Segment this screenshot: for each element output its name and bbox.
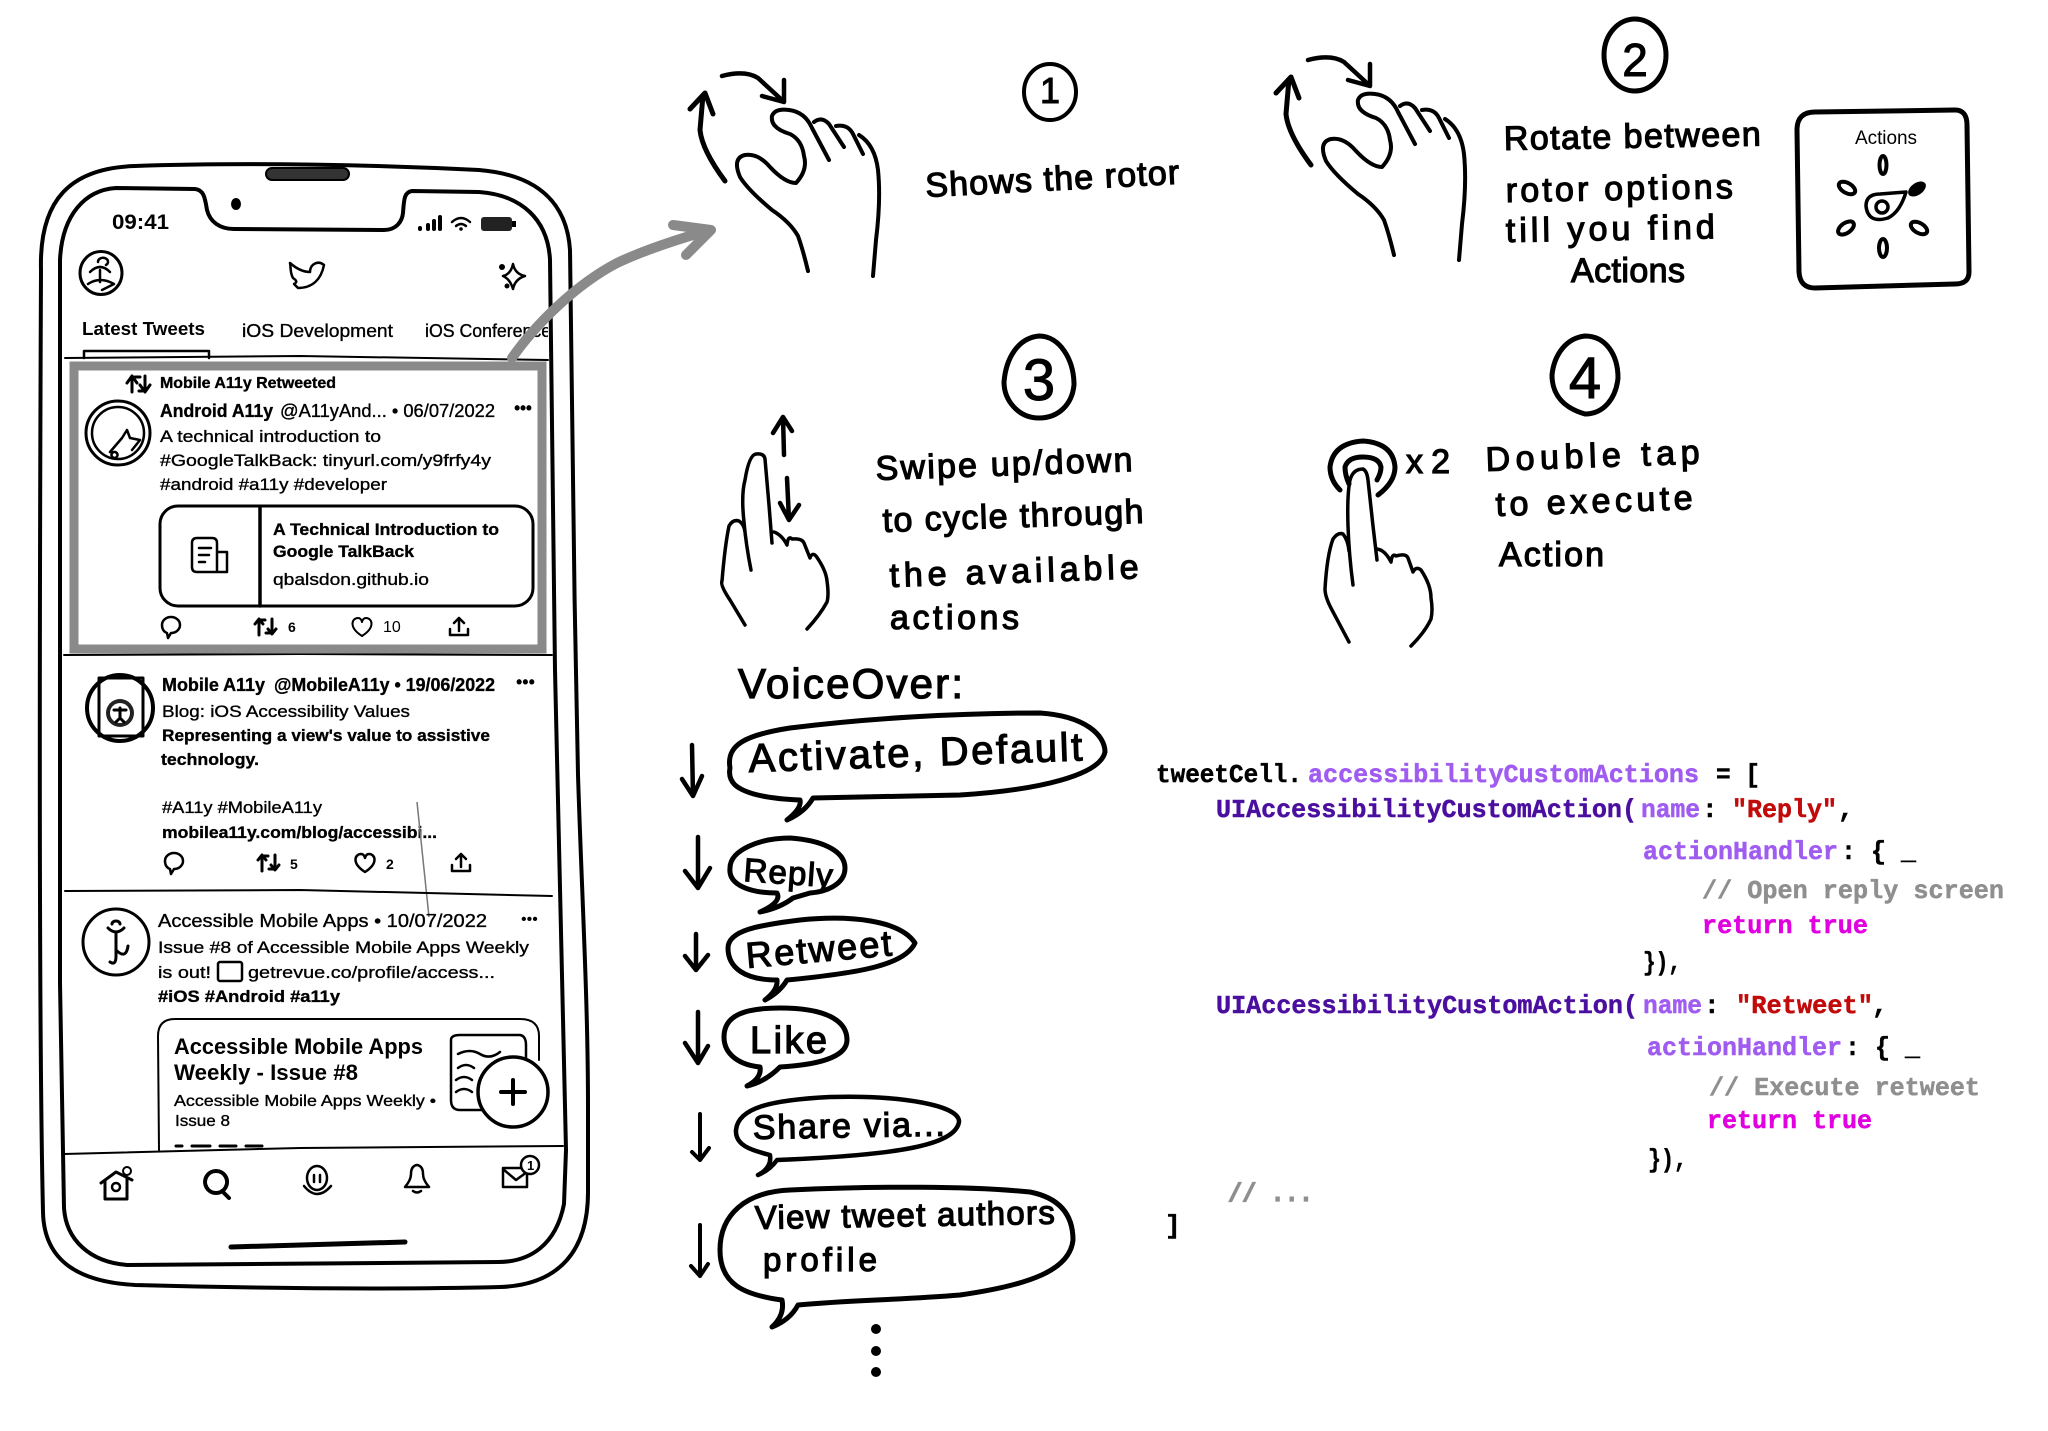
step 1 text: Shows the rotor [924,154,1180,205]
step 4 [1325,336,1700,646]
retweet action code: // Execute retweet [1709,1073,1980,1103]
handle and date: @MobileA11y • 19/06/2022 [274,675,495,695]
tweet one [86,375,533,638]
phone mockup [40,164,588,1288]
rotor label: Actions [1855,128,1917,149]
card title: Accessible Mobile Apps [174,1034,423,1059]
reply action code: actionHandler [1643,837,1838,867]
code line 1: accessibilityCustomActions [1308,760,1699,790]
step 2 text: Actions [1571,252,1685,290]
link card: Issue 8 [175,1113,230,1130]
arrow [682,745,702,796]
link card [160,506,533,606]
author and date: Accessible Mobile Apps • 10/07/2022 [158,911,487,931]
step 2 text [1503,116,1761,290]
action row: 6 [288,619,296,635]
voiceover speech list [682,713,1105,1377]
step number 2 [1604,19,1666,91]
bottom tab bar [64,1146,563,1247]
reply action code: name [1641,795,1700,825]
overflow menu: ••• [521,911,538,928]
card thumbnail [451,1035,526,1110]
code placeholder comment: // ... [1228,1179,1313,1209]
rotate hand gesture [690,73,879,276]
avatar [87,675,153,741]
action row: 2 [386,856,394,872]
step 1 [690,64,1180,276]
bubble: share via: Share via... [752,1106,945,1147]
tab: ios development: iOS Development [242,321,393,341]
rotor petals [1836,156,1929,257]
tab indicator [84,351,209,358]
arrow [691,1225,708,1276]
tweet body: Representing a view's value to assistive [162,726,490,745]
phone inner screen outline [60,188,566,1265]
tweet body: #android #a11y #developer [160,475,387,494]
step number 1: 1 [1040,70,1060,111]
arrow [692,1114,709,1160]
action row [162,617,468,638]
avatar [86,401,150,465]
overflow menu: ••• [516,672,535,692]
card description: Accessible Mobile Apps Weekly • [174,1093,436,1110]
retweet action code: "Retweet" [1736,991,1873,1021]
step 4 text: to execute [1495,479,1693,524]
bubble: activate default [729,713,1105,820]
step number 3: 3 [1023,348,1055,413]
step number 1 [1024,64,1076,120]
swipe hand [722,454,828,629]
reply action code [1216,795,2004,978]
step 4 text [1485,434,1700,574]
reply action code: return true [1702,911,1868,941]
code line 1: tweetCell. [1156,760,1302,790]
retweet action code: UIAccessibilityCustomAction( [1216,991,1638,1021]
voiceover heading: VoiceOver: [738,660,963,707]
step 3 text: the available [889,548,1139,595]
phone outer body [40,164,588,1288]
tweet body [158,938,530,1006]
link card: Google TalkBack [273,542,415,561]
arrow [685,837,710,888]
step 3 text: actions [890,599,1019,637]
reply action code: UIAccessibilityCustomAction( [1216,795,1637,825]
tweet body: #iOS #Android #a11y [158,987,341,1006]
sparkle icon [499,264,525,289]
times two label: x2 [1406,443,1450,481]
closing bracket: ] [1165,1211,1181,1241]
tab bar [83,322,548,342]
tweet body [161,702,490,842]
status icons [420,217,516,231]
tweet body: mobilea11y.com/blog/accessibi... [162,823,437,842]
handle and date: @A11yAnd... • 06/07/2022 [280,401,495,421]
tweet body: Issue #8 of Accessible Mobile Apps Weekly [158,938,530,957]
home indicator [231,1242,405,1247]
step number 4: 4 [1569,346,1601,411]
step 2 text: rotor options [1505,168,1733,210]
retweet action code: : [1704,991,1720,1021]
code line 1: = [ [1716,760,1760,790]
link card: Weekly - Issue #8 [174,1060,358,1085]
tab: latest tweets: Latest Tweets [82,319,205,339]
bubble: like [724,1008,847,1086]
bubble: share via [736,1097,959,1175]
action row: 10 [383,619,401,636]
speaker grille [266,168,349,180]
profile avatar [80,252,122,294]
step number 4 [1552,336,1618,414]
messages icon [503,1156,539,1187]
reply action code: "Reply" [1732,795,1837,825]
reply action code: // Open reply screen [1702,876,2004,906]
floating compose button [478,1057,548,1127]
author name: Android A11y [160,401,273,421]
tap hand [1325,469,1432,646]
tweet body: A technical introduction to [160,427,381,446]
author name: Mobile A11y [162,675,265,695]
twitter bird logo [290,263,324,288]
action row: 5 [290,856,298,872]
step 2 [1276,19,1969,290]
spaces icon [304,1166,331,1194]
tweet body: technology. [161,750,259,769]
front camera [231,198,241,210]
bubble: view tweet authors profile [720,1187,1073,1327]
avatar [83,909,149,975]
reply action code: : { _ [1841,837,1916,867]
tweet body: #A11y #MobileA11y [162,798,323,817]
step number 2: 2 [1622,34,1648,86]
retweet action code: name [1643,991,1702,1021]
bubble: activate default: Activate, Default [748,725,1083,781]
tweet body: #GoogleTalkBack: tinyurl.com/y9frfy4y [160,451,492,470]
retweeted label: Mobile A11y Retweeted [160,375,336,392]
tweet three [83,909,539,1150]
rotate hand gesture [1276,57,1465,260]
grey arrow to gesture [512,225,711,358]
step 4 text: Double tap [1485,434,1700,479]
card title: A Technical Introduction to [273,520,499,539]
tweet body: Blog: iOS Accessibility Values [162,702,410,721]
document icon [192,538,227,572]
reply action code: }), [1643,948,1681,978]
step 3 text: Swipe up/down [875,441,1133,488]
card domain: qbalsdon.github.io [273,570,429,589]
tweet body [160,427,492,494]
step 3 text: to cycle through [882,493,1144,540]
retweet icon [127,376,150,392]
retweet action code: , [1872,991,1888,1021]
highlight frame around first tweet [74,366,542,649]
retweet action code: : { _ [1845,1033,1920,1063]
tweet body: getrevue.co/profile/access... [248,963,495,982]
messages icon: 1 [527,1158,534,1173]
arrow [685,1012,708,1063]
retweet action code: actionHandler [1647,1033,1842,1063]
actions rotor box [1797,110,1969,288]
bubble: reply: Reply [743,851,834,894]
tweet two [87,672,535,874]
home icon [101,1167,132,1199]
link card [158,1019,539,1150]
step 3 [722,336,1144,637]
retweet action code: }), [1648,1145,1687,1175]
double tap rings [1330,441,1395,495]
step 2 text: till you find [1505,208,1715,250]
step 3 text [875,441,1144,637]
bell icon [405,1165,429,1192]
search icon [205,1171,229,1198]
overflow menu: ••• [514,398,532,418]
bubble: retweet [728,918,915,1000]
status time: 09:41 [112,211,169,234]
step 4 text: Action [1499,536,1604,574]
bubble: view tweet authors profile: View tweet authors [754,1194,1055,1236]
code line 1 [1156,760,1760,790]
reply action code: , [1838,795,1854,825]
retweet action code: return true [1707,1106,1872,1136]
step number 3 [1004,336,1074,418]
bubble: like: Like [750,1020,827,1062]
step 2 text: Rotate between [1503,116,1761,158]
swipe up and down arrows [773,417,799,520]
bubble: view tweet authors profile: profile [763,1241,877,1278]
arrow [685,934,708,970]
bubble: reply [730,838,845,912]
action row [165,853,470,874]
rotor centre eye [1866,192,1906,220]
tab: ios conferences: iOS Conferences [425,321,560,341]
tweet body: is out! [158,963,211,982]
reply action code: : [1702,795,1718,825]
retweet action code [1216,991,1980,1175]
continuation dots [871,1324,881,1377]
bubble: retweet: Retweet [744,922,893,976]
code snippet [1156,760,2004,1241]
